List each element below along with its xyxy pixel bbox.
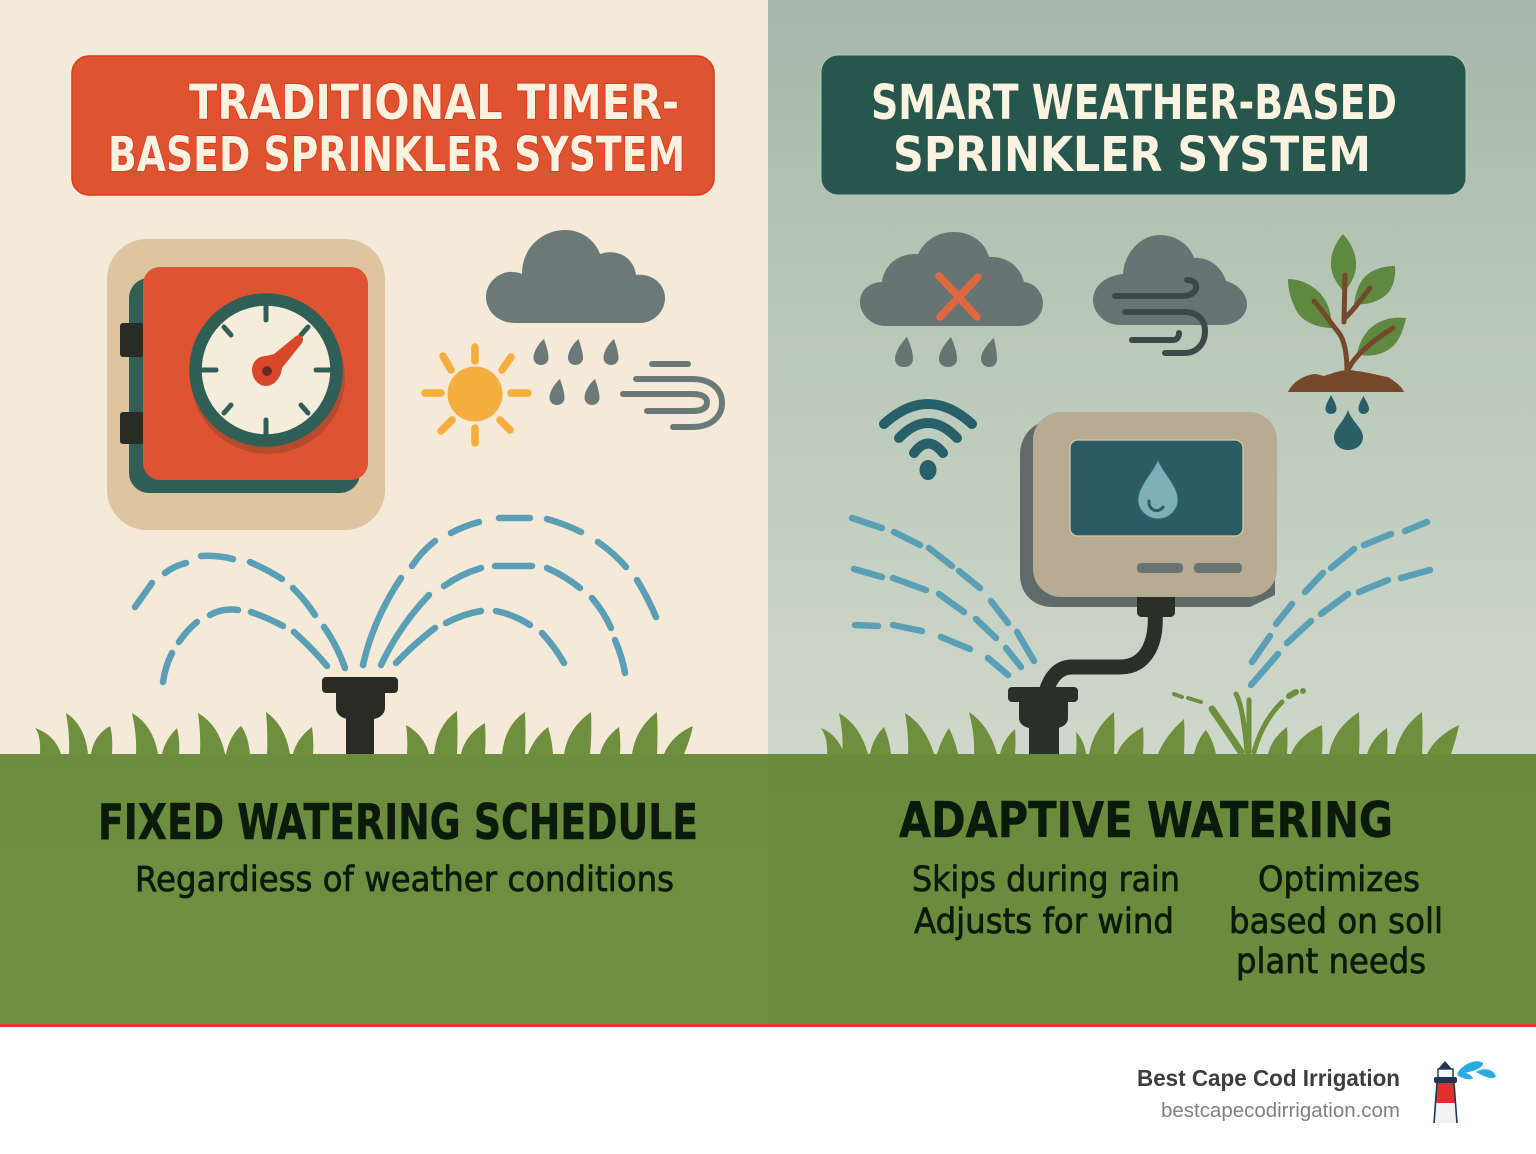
red divider line — [0, 1024, 1536, 1027]
water spray: left sprinkler — [135, 518, 656, 682]
panel: smart weather-based system — [768, 0, 1536, 754]
text: optimizes list: based on soll — [1229, 902, 1443, 942]
footer brand — [1137, 1061, 1496, 1123]
header banner: smart: SPRINKLER SYSTEM — [893, 127, 1371, 183]
icon: cloud with wind — [1093, 235, 1247, 353]
sprinkler head: left — [322, 677, 398, 754]
header banner: smart — [821, 55, 1466, 195]
icon: wind — [623, 364, 722, 427]
ground band left — [0, 754, 768, 1024]
icon: wifi signal — [884, 404, 972, 480]
grass: right — [821, 712, 1459, 754]
icon: cloud with rain cancelled — [860, 232, 1043, 367]
text: rain and wind list: Skips during rain — [912, 860, 1180, 900]
heading: adaptive watering: ADAPTIVE WATERING — [899, 792, 1393, 849]
panel: traditional timer-based system — [0, 0, 768, 754]
grass: left — [35, 711, 693, 754]
header banner: smart: SMART WEATHER-BASED — [871, 75, 1397, 131]
water spray: right panel left side — [852, 518, 1034, 675]
header banner: traditional — [72, 56, 714, 195]
icon: plant with soil and drops — [1288, 234, 1406, 450]
hose connector — [1137, 597, 1175, 617]
heading: fixed watering schedule: FIXED WATERING SCHEDULE — [98, 794, 698, 851]
text: optimizes list — [1229, 860, 1443, 982]
panel background: sage sky — [768, 0, 1536, 754]
icon: rain cloud — [486, 230, 665, 405]
panel: ground text left — [0, 754, 768, 1024]
brand url: bestcapecodirrigation.com — [1161, 1100, 1400, 1122]
sprout with broken spray — [1174, 688, 1306, 752]
text: optimizes list: plant needs — [1236, 942, 1426, 982]
icon: sun — [425, 347, 528, 443]
hose from controller to sprinkler — [1046, 612, 1155, 692]
icon: timer controller — [107, 239, 385, 530]
panel background: cream — [0, 0, 768, 754]
icon: lighthouse with water — [1434, 1061, 1496, 1123]
text: optimizes list: Optimizes — [1258, 860, 1420, 900]
panel: ground text right — [768, 754, 1536, 1024]
sprinkler head: right — [1008, 687, 1078, 754]
ground band right — [768, 754, 1536, 1024]
brand name: Best Cape Cod Irrigation — [1137, 1065, 1400, 1091]
header banner: traditional: TRADITIONAL TIMER- — [189, 75, 679, 131]
text: rain and wind list — [912, 860, 1180, 942]
smart controller device — [1020, 412, 1277, 607]
header banner: traditional: BASED SPRINKLER SYSTEM — [108, 127, 685, 183]
water spray: right panel right side — [1251, 522, 1430, 685]
text: rain and wind list: Adjusts for wind — [914, 902, 1174, 942]
text: regardless of weather: Regardiess of weather conditions — [135, 860, 674, 900]
